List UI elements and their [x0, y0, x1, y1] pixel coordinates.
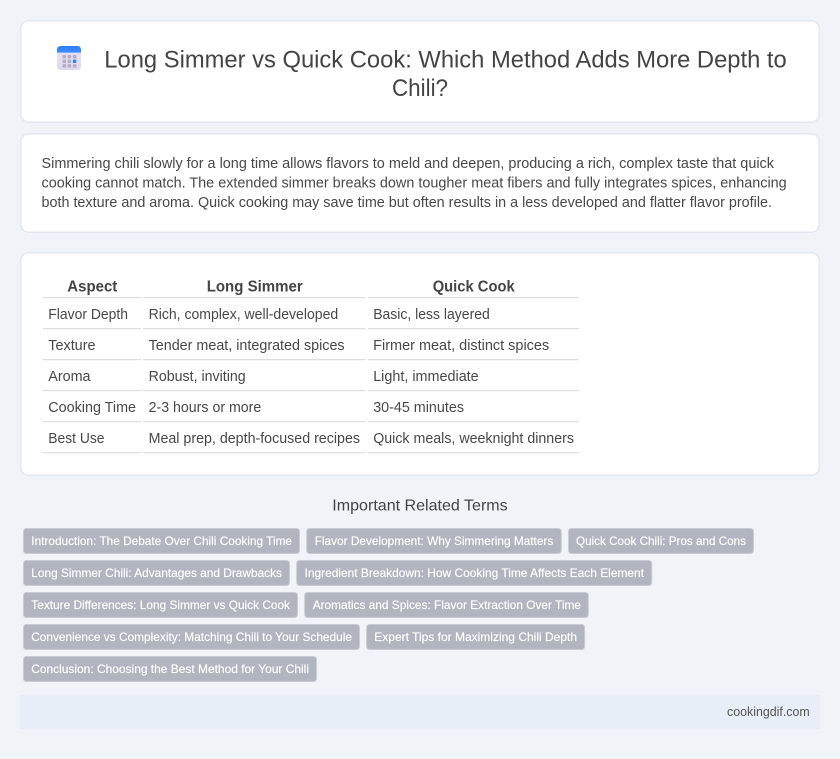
- tag: expert tips: [367, 624, 585, 650]
- table row: texture: [43, 338, 579, 360]
- table row: flavor depth: Flavor Depth: [48, 307, 128, 323]
- tag: conclusion: Conclusion: Choosing the Best Method for Your Chili: [31, 662, 309, 676]
- table row: best use: Quick meals, weeknight dinners: [373, 431, 574, 447]
- tag: ingredient breakdown: Ingredient Breakdown: How Cooking Time Affects Each Element: [304, 566, 645, 580]
- panel: title header: [21, 21, 819, 122]
- panel: related term tags: [24, 528, 754, 682]
- heading: important related terms: Important Related Terms: [332, 498, 508, 515]
- table header row: Long Simmer: [207, 279, 303, 296]
- tag: texture differences: Texture Differences: Long Simmer vs Quick Cook: [31, 598, 291, 612]
- table row: aroma: [43, 369, 579, 391]
- table row: best use: Meal prep, depth-focused recipes: [149, 431, 360, 447]
- table row: flavor depth: Basic, less layered: [373, 307, 490, 323]
- tag: convenience vs complexity: [24, 624, 360, 650]
- tag: introduction: [24, 528, 300, 554]
- table row: texture: Texture: [48, 338, 96, 354]
- tag: long simmer chili: Long Simmer Chili: Advantages and Drawbacks: [31, 566, 282, 580]
- tag: long simmer chili: [24, 560, 290, 586]
- table row: flavor depth: Rich, complex, well-developed: [149, 307, 338, 323]
- text block: introduction: Simmering chili slowly for a long time allows flavors to meld and deepen, producing a rich, complex taste that quick: [42, 156, 775, 172]
- table header row: [43, 279, 579, 298]
- tag: aromatics and spices: Aromatics and Spices: Flavor Extraction Over Time: [313, 598, 581, 612]
- panel: introduction text: [21, 134, 819, 232]
- table row: flavor depth: [43, 307, 579, 329]
- footer: [20, 695, 820, 729]
- table row: aroma: Robust, inviting: [149, 369, 246, 385]
- tag: aromatics and spices: [305, 592, 588, 618]
- table header row: Aspect: [67, 279, 118, 296]
- tag: convenience vs complexity: Convenience vs Complexity: Matching Chili to Your Schedule: [31, 630, 352, 644]
- tag: quick cook chili: Quick Cook Chili: Pros and Cons: [576, 534, 746, 548]
- table row: cooking time: 2-3 hours or more: [149, 400, 261, 416]
- table row: texture: Tender meat, integrated spices: [149, 338, 345, 354]
- title: Chili?: [392, 75, 448, 102]
- tag: conclusion: [24, 656, 316, 682]
- tag: ingredient breakdown: [297, 560, 652, 586]
- title: [104, 46, 787, 102]
- table row: texture: Firmer meat, distinct spices: [373, 338, 549, 354]
- text block: introduction: cooking cannot match. The extended simmer breaks down tougher meat fibers and fully integrates spices, enhancing: [42, 176, 787, 192]
- tag: texture differences: [24, 592, 298, 618]
- panel: comparison table: [21, 253, 819, 475]
- table row: cooking time: Cooking Time: [48, 400, 136, 416]
- text block: introduction: [42, 156, 787, 211]
- tag: flavor development: [307, 528, 561, 554]
- tag: flavor development: Flavor Development: Why Simmering Matters: [315, 534, 553, 548]
- tag: introduction: Introduction: The Debate Over Chili Cooking Time: [31, 534, 292, 548]
- tag: expert tips: Expert Tips for Maximizing Chili Depth: [374, 630, 577, 644]
- table row: aroma: Light, immediate: [373, 369, 479, 385]
- table row: cooking time: [43, 400, 579, 422]
- table row: best use: Best Use: [48, 431, 104, 447]
- title: Long Simmer vs Quick Cook: Which Method Adds More Depth to: [104, 46, 787, 74]
- footer: cookingdif.com: [727, 704, 810, 719]
- table header row: Quick Cook: [433, 279, 515, 296]
- text block: introduction: both texture and aroma. Quick cooking may save time but often results in a less developed and flatter flavor profile.: [42, 195, 772, 211]
- table row: cooking time: 30-45 minutes: [373, 400, 464, 416]
- table row: best use: [43, 431, 579, 453]
- icon: calendar: [57, 46, 81, 70]
- tag: quick cook chili: [568, 528, 754, 554]
- table row: aroma: Aroma: [48, 369, 90, 385]
